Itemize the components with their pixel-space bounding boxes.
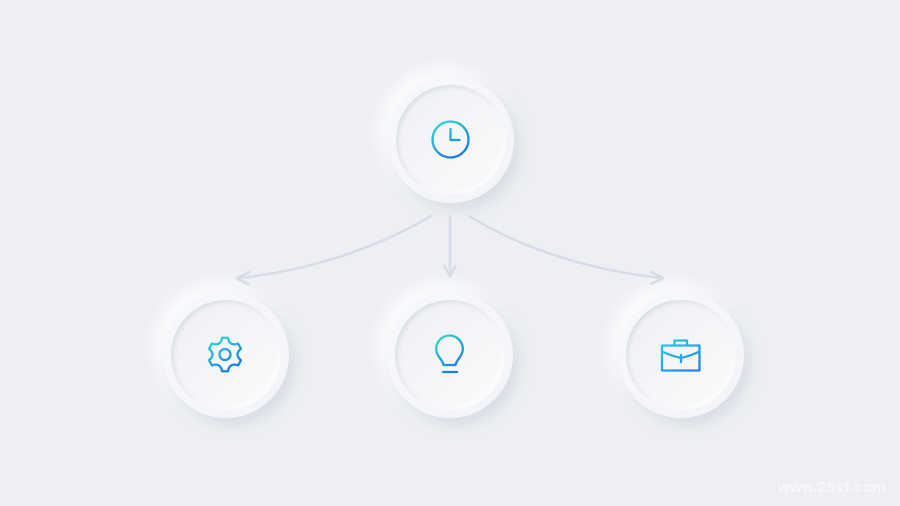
node: top clock circle bbox=[388, 77, 514, 203]
icon: light bulb bbox=[436, 336, 463, 372]
node: left gear circle bbox=[163, 292, 289, 418]
node: right briefcase circle bbox=[618, 292, 744, 418]
icon: briefcase bbox=[662, 340, 700, 370]
arrow: to right node bbox=[469, 216, 663, 284]
watermark: www.25xt.com bbox=[778, 479, 886, 496]
icon: clock bbox=[432, 122, 468, 158]
icon: gear bbox=[209, 338, 241, 371]
node: center bulb circle bbox=[387, 292, 513, 418]
arrow: to left node bbox=[237, 216, 431, 284]
arrow: to center node bbox=[444, 216, 456, 276]
